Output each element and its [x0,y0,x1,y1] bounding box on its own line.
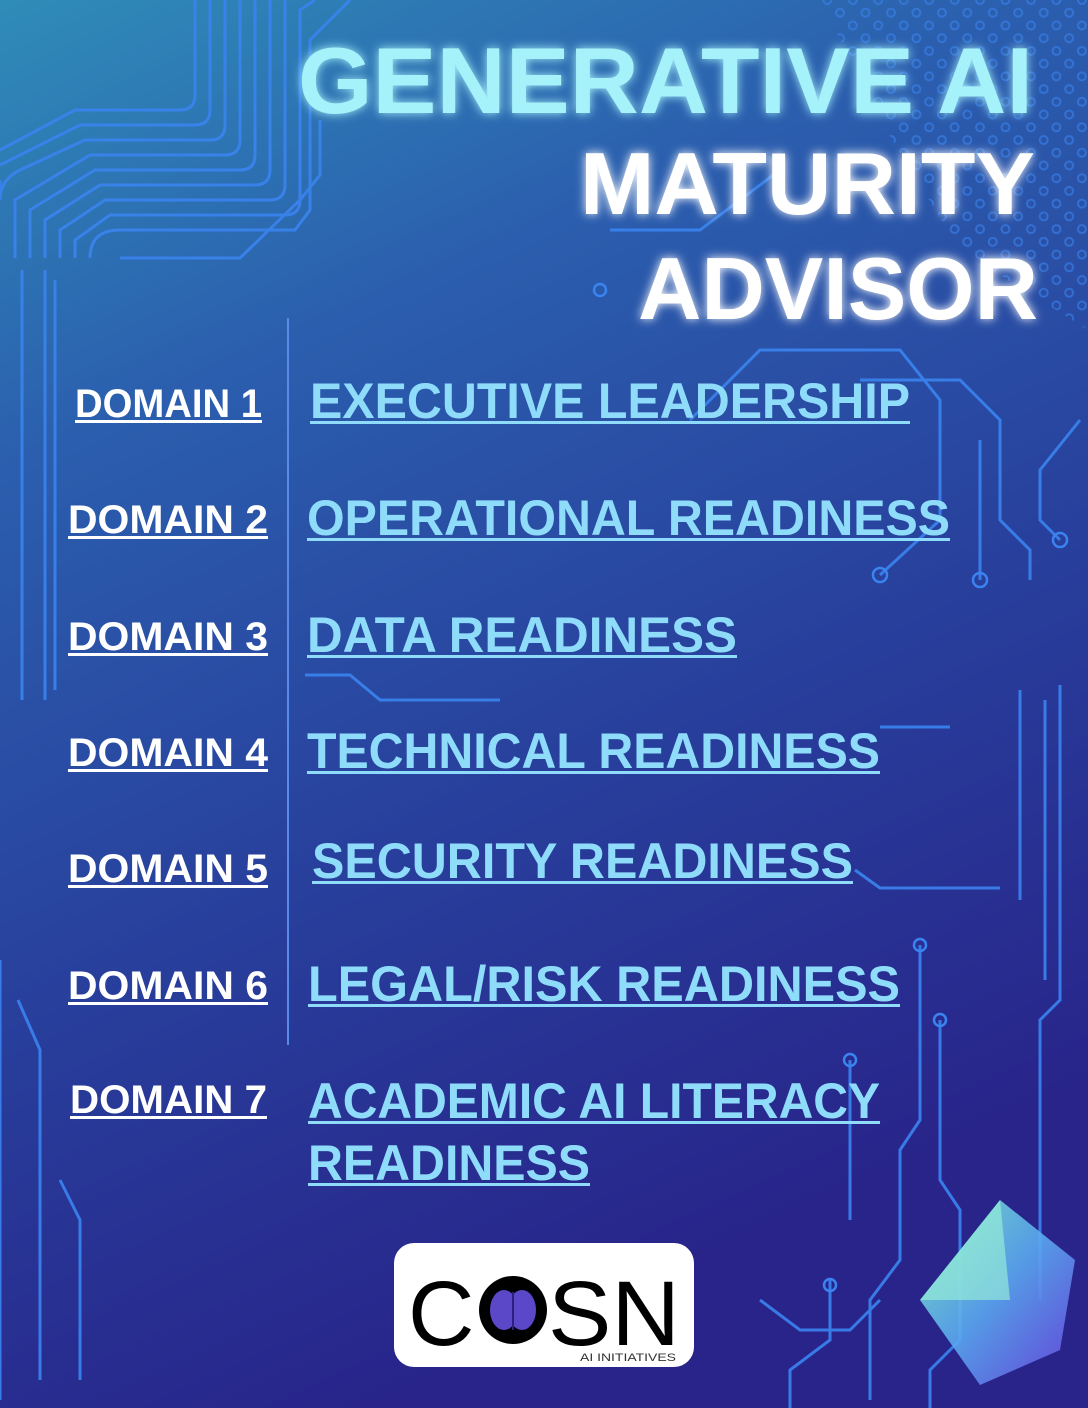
logo: CoSN AI Initiatives: SN [548,1263,680,1365]
logo: CoSN AI Initiatives: AI INITIATIVES [580,1352,676,1364]
domain 4: TECHNICAL READINESS [307,723,880,779]
divider line [287,318,289,1045]
domain 3 [68,607,737,663]
title [298,28,1038,338]
domain 6 [68,956,900,1012]
title: GENERATIVE AI [298,28,1033,133]
icon: brain [490,1290,536,1330]
domain 4 [68,723,880,779]
domain 7: ACADEMIC AI LITERACY [308,1073,880,1129]
domain 4: DOMAIN 4 [68,731,269,775]
domain 6: DOMAIN 6 [68,964,268,1008]
logo: CoSN AI Initiatives: C [408,1263,474,1365]
domain 2: DOMAIN 2 [68,498,268,542]
domain 2: OPERATIONAL READINESS [307,490,950,546]
domain 7 [70,1073,880,1191]
domain 1: DOMAIN 1 [75,382,262,426]
domain 7: READINESS [308,1135,590,1191]
domain 5 [68,833,853,891]
domain 5: SECURITY READINESS [312,833,853,889]
domain 1: EXECUTIVE LEADERSHIP [310,373,910,429]
domain 6: LEGAL/RISK READINESS [308,956,900,1012]
domain 3: DOMAIN 3 [68,615,268,659]
domain 3: DATA READINESS [307,607,737,663]
domain 7: DOMAIN 7 [70,1078,267,1122]
domain list [68,373,950,1191]
logo: CoSN AI Initiatives [394,1243,694,1367]
decorative dot grid [820,0,1088,330]
title: MATURITY [580,134,1035,233]
title: ADVISOR [638,239,1038,338]
icon: gem [920,1200,1075,1385]
domain 5: DOMAIN 5 [68,847,268,891]
